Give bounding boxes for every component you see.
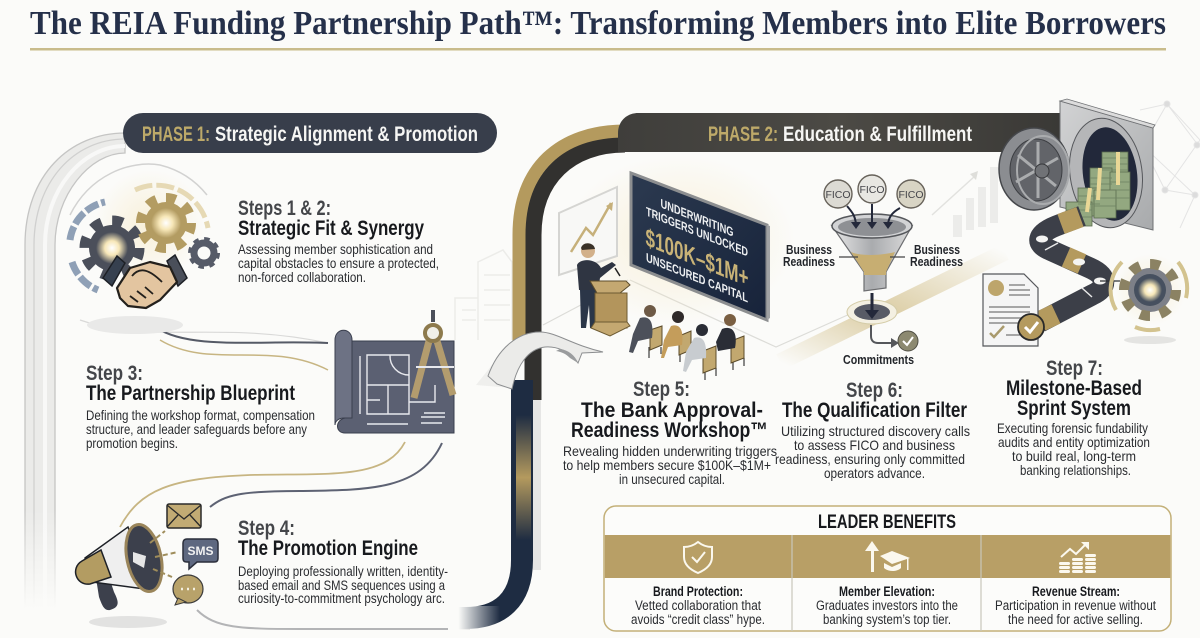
step 6 text: operators advance.: [824, 465, 925, 481]
panel: leader benefits: LEADER BENEFITS: [818, 512, 956, 533]
benefit: brand protection: Vetted collaboration that: [635, 598, 761, 613]
step 3 text: Step 3:: [86, 362, 143, 385]
connector band: gold and dark S-curve: [448, 131, 625, 632]
benefit: brand protection: Brand Protection:: [653, 584, 743, 599]
step 7 text: Executing forensic fundability: [997, 420, 1148, 436]
step 1 and 2 text: capital obstacles to ensure a protected,: [238, 255, 439, 271]
step 1 and 2 text: [238, 197, 439, 285]
step 4 text: [238, 517, 448, 606]
funnel labels: Business: [786, 242, 832, 257]
step 6 illustration: FICO funnel: FICO: [859, 184, 885, 196]
step 1 and 2 text: Strategic Fit & Synergy: [238, 217, 424, 240]
step 6 illustration: FICO funnel: FICO: [898, 189, 924, 201]
step 6 text: Step 6:: [846, 379, 903, 402]
step 7 text: Step 7:: [1046, 357, 1103, 380]
step 3 text: promotion begins.: [86, 435, 178, 451]
step 7 text: to build real, long-term: [1012, 448, 1136, 464]
step 5 text: Readiness Workshop™: [571, 419, 768, 442]
phase 1 banner: [123, 113, 497, 153]
phase 2 banner: [618, 113, 1060, 152]
benefit: revenue stream: the need for active selling.: [1008, 612, 1143, 627]
benefit: revenue stream: [995, 584, 1156, 627]
step 5 text: The Bank Approval-: [581, 399, 763, 422]
step 3 text: [86, 362, 315, 451]
phase 2 banner: PHASE 2:: [708, 123, 778, 146]
step 3 text: structure, and leader safeguards before any: [86, 421, 307, 437]
funnel labels: [783, 242, 963, 367]
step 5 illustration: presenter, screen and audience: $100K–$1M+: [646, 222, 748, 293]
arch: phase 1 path: [15, 133, 207, 626]
panel: leader benefits: [604, 506, 1171, 631]
icon: shield: [684, 542, 712, 573]
icon: arrow and graduation cap: [865, 541, 910, 572]
step 6 illustration: FICO funnel: [783, 175, 963, 367]
step 5 illustration: presenter, screen and audience: [559, 155, 795, 380]
funnel labels: Readiness: [910, 254, 963, 269]
funnel labels: Readiness: [783, 254, 835, 269]
swoosh lines: [80, 316, 470, 629]
icon: coins and growth arrow: [1059, 542, 1096, 573]
benefit: member elevation: Member Elevation:: [839, 584, 935, 599]
icon: gears and handshake: [70, 170, 218, 308]
benefit: revenue stream: Revenue Stream:: [1032, 584, 1120, 599]
step 7 illustration: vault, money, road, document and gear: [983, 99, 1187, 346]
icon: blueprint and compass: [335, 310, 454, 433]
icon: megaphone with messages: [76, 504, 218, 610]
step 6 text: to assess FICO and business: [794, 437, 955, 453]
step 5 illustration: presenter, screen and audience: UNDERWRITING: [661, 196, 733, 240]
step 7 text: audits and entity optimization: [998, 434, 1150, 450]
step 7 text: Sprint System: [1017, 397, 1131, 420]
step 5 text: Step 5:: [633, 378, 690, 401]
benefit: revenue stream: Participation in revenue without: [995, 598, 1156, 613]
step 1 and 2 text: non-forced collaboration.: [238, 269, 366, 285]
audience: [629, 305, 744, 380]
phase 1 banner: Strategic Alignment & Promotion: [215, 123, 478, 146]
benefit: brand protection: avoids “credit class” hype.: [631, 612, 765, 627]
step 6 text: The Qualification Filter: [782, 399, 967, 422]
step 1 and 2 text: Steps 1 & 2:: [238, 197, 331, 220]
step 6 illustration: FICO funnel: FICO: [825, 189, 851, 201]
step 6 text: readiness, ensuring only committed: [775, 451, 965, 467]
step 3 text: Defining the workshop format, compensation: [86, 407, 315, 423]
floor lines and gold diagonal path: [543, 252, 1005, 362]
step 4 text: based email and SMS sequences using a: [238, 577, 445, 593]
faint buildings: [455, 250, 512, 340]
benefit: member elevation: [816, 584, 958, 627]
step 7 text: Milestone-Based: [1006, 377, 1142, 400]
phase 2 banner: Education & Fulfillment: [783, 123, 972, 146]
step 4 text: Deploying professionally written, identity-: [238, 563, 448, 579]
icon: megaphone with messages: SMS: [188, 544, 214, 558]
step 5 illustration: presenter, screen and audience: UNSECURED CAPITAL: [646, 250, 748, 306]
step 4 text: Step 4:: [238, 517, 295, 540]
step 5 text: to help members secure $100K–$1M+: [563, 457, 771, 473]
step 7 text: banking relationships.: [1020, 462, 1131, 478]
step 1 and 2 text: Assessing member sophistication and: [238, 241, 433, 257]
step 5 illustration: presenter, screen and audience: TRIGGERS UNLOCKED: [646, 204, 748, 259]
step 5 text: in unsecured capital.: [619, 471, 725, 487]
step 6 text: [775, 379, 970, 481]
funnel labels: Business: [914, 242, 960, 257]
decorative network lines: [1140, 101, 1200, 228]
step 5 text: Revealing hidden underwriting triggers: [563, 443, 777, 459]
faint bar chart behind road: [932, 167, 998, 237]
step 7 text: [997, 357, 1150, 478]
funnel labels: Commitments: [843, 352, 914, 367]
step 5 text: [563, 378, 777, 487]
step 4 text: The Promotion Engine: [238, 537, 418, 560]
benefit: member elevation: banking system’s top tier.: [823, 612, 951, 627]
step 3 text: The Partnership Blueprint: [86, 382, 295, 405]
benefit: brand protection: [631, 584, 765, 627]
step 6 text: Utilizing structured discovery calls: [781, 423, 970, 439]
benefit: member elevation: Graduates investors into the: [816, 598, 958, 613]
step 4 text: curiosity-to-commitment psychology arc.: [238, 590, 445, 606]
phase 1 banner: PHASE 1:: [142, 123, 210, 146]
